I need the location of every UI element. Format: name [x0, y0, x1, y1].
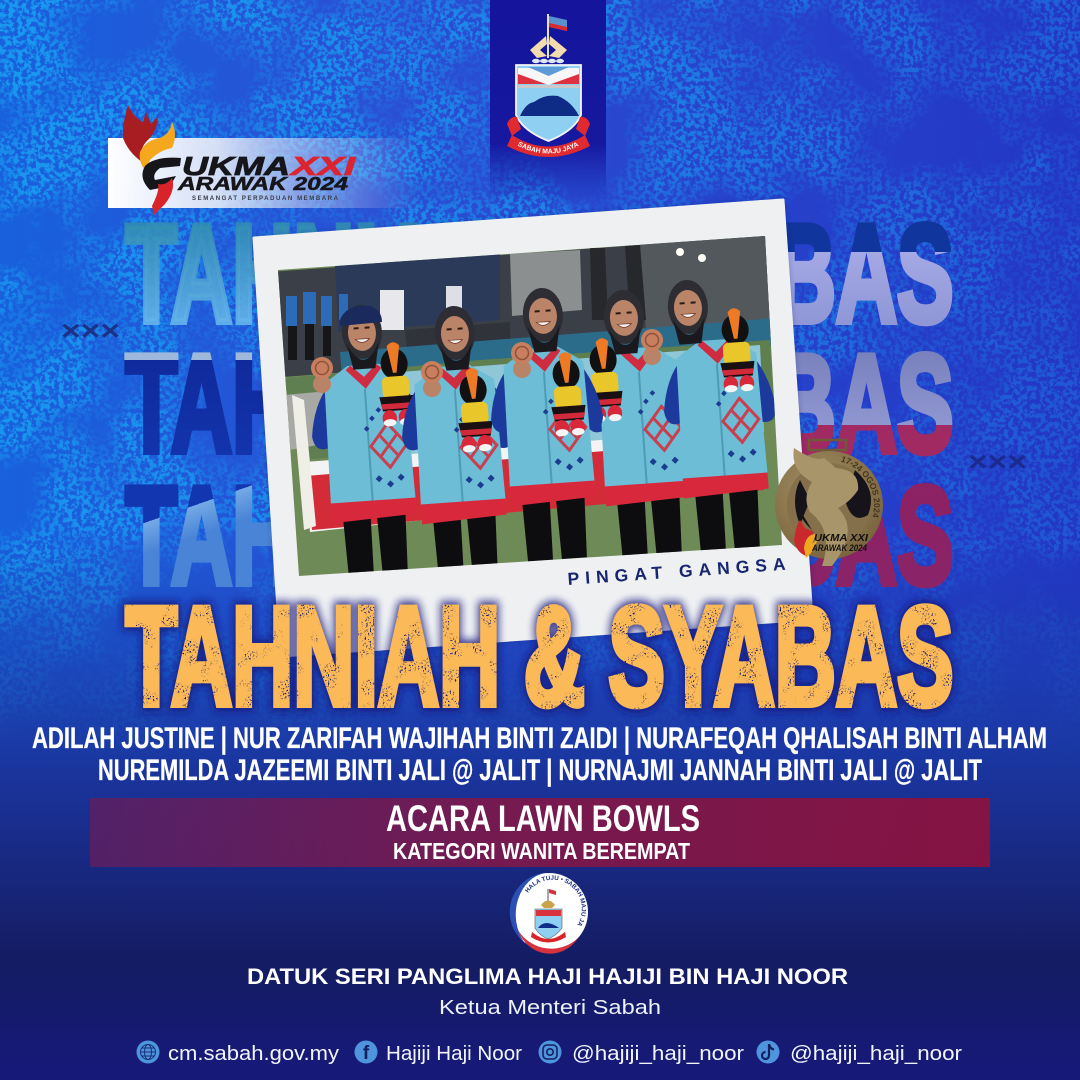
team photo	[270, 230, 790, 581]
event category: KATEGORI WANITA BEREMPAT	[393, 838, 690, 864]
dignitary name: DATUK SERI PANGLIMA HAJI HAJIJI BIN HAJI NOOR	[247, 964, 848, 989]
logo: SUKMA XXI Sarawak 2024: SEMANGAT PERPADUAN MEMBARA	[192, 196, 339, 202]
logo: SUKMA XXI Sarawak 2024: UKMA	[182, 151, 290, 181]
logo: Hala Tuju round badge	[510, 873, 588, 954]
athlete 5	[664, 280, 775, 550]
tiktok link: @hajiji_haji_noor	[790, 1043, 962, 1065]
instagram link	[538, 1040, 744, 1065]
dignitary title: Ketua Menteri Sabah	[439, 997, 661, 1019]
sukma logo backdrop	[108, 138, 420, 208]
athlete names	[32, 722, 1047, 787]
logo: SUKMA XXI Sarawak 2024	[123, 105, 356, 215]
main heading	[126, 578, 954, 734]
website link	[136, 1040, 339, 1065]
ghost repeated heading text, right side	[786, 221, 952, 588]
facebook link: Hajiji Haji Noor	[386, 1043, 522, 1065]
instagram link: @hajiji_haji_noor	[572, 1043, 744, 1065]
icon: bronze medal: ARAWAK 2024	[811, 543, 867, 553]
website link: cm.sabah.gov.my	[168, 1043, 339, 1065]
icon: bronze medal: UKMA XXI	[814, 533, 868, 544]
ghost repeated heading text, left side	[124, 222, 448, 587]
logo: Hala Tuju round badge: HALA TUJU • SABAH MAJU JAYA	[524, 876, 586, 926]
icon: Sabah state crest: SABAH MAJU JAYA	[518, 142, 579, 154]
decorative xxx mark, left: ×××	[61, 315, 120, 346]
logo: SUKMA XXI Sarawak 2024: ARAWAK 2024	[177, 174, 348, 194]
panel: tilted photo frame	[253, 199, 814, 658]
icon: bronze medal	[775, 438, 883, 566]
event band	[90, 798, 990, 867]
athlete 1	[311, 305, 416, 573]
decorative xxx mark, right: ×××	[968, 446, 1027, 477]
icon: Sabah state crest	[507, 14, 590, 157]
icon: bronze medal: 17-24 OGOS 2024	[841, 456, 880, 518]
tiktok link	[756, 1040, 962, 1065]
logo: SUKMA XXI Sarawak 2024: XXI	[288, 151, 356, 181]
frame shadow	[253, 199, 814, 658]
facebook link: f	[363, 1043, 370, 1064]
athlete 3	[491, 288, 604, 562]
medal caption: PINGAT GANGSA	[567, 554, 790, 589]
crest panel	[490, 0, 606, 205]
athlete 4	[590, 290, 684, 556]
social links row	[136, 1040, 962, 1065]
event title: ACARA LAWN BOWLS	[386, 798, 700, 839]
white photo card	[254, 200, 812, 656]
athlete 2	[402, 306, 508, 568]
